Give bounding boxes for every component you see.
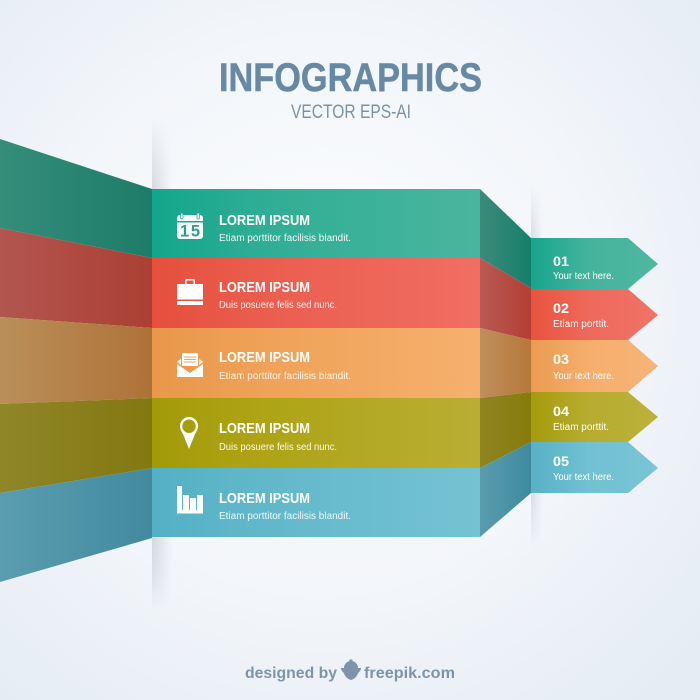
title: INFOGRAPHICS (219, 56, 482, 100)
panel: band 2 red (152, 258, 480, 329)
heading: LOREM IPSUM (219, 213, 310, 229)
footer credit: designed by (245, 665, 337, 682)
number: 01 (553, 253, 569, 269)
text block: Duis posuere felis sed nunc. (219, 442, 337, 453)
icon: calendar: 15 (180, 222, 200, 240)
right fold bands (480, 189, 531, 537)
footer credit: freepik.com (364, 665, 455, 682)
text block: Etiam porttitor facilisis blandit. (219, 371, 351, 382)
caption: Etiam porttit. (553, 319, 609, 330)
caption: Your text here. (553, 371, 614, 382)
arrow 03 orange (531, 340, 658, 392)
subtitle: VECTOR EPS-AI (291, 102, 411, 123)
panel: band 3 orange (152, 328, 480, 399)
arrow 01 teal (531, 238, 658, 289)
heading: LOREM IPSUM (219, 350, 310, 366)
icon: envelope (177, 353, 203, 377)
text block: Etiam porttitor facilisis blandit. (219, 233, 351, 244)
heading: LOREM IPSUM (219, 491, 310, 507)
arrow 05 blue (531, 442, 658, 493)
panel: band 4 olive (152, 398, 480, 469)
footer credit (245, 660, 455, 682)
icon: map pin (180, 417, 198, 449)
left receding bands (0, 139, 152, 582)
icon: bar chart (177, 486, 203, 514)
panel: band 1 teal (152, 189, 480, 259)
icon: calendar (177, 213, 203, 240)
heading: LOREM IPSUM (219, 421, 310, 437)
caption: Your text here. (553, 472, 614, 483)
heading: LOREM IPSUM (219, 280, 310, 296)
arrow 04 olive (531, 392, 658, 442)
arrow 02 red (531, 289, 658, 340)
icon: briefcase (177, 279, 203, 305)
number: 04 (553, 403, 569, 419)
caption: Your text here. (553, 271, 614, 282)
icon: freepik logo (341, 660, 361, 680)
text block: Etiam porttitor facilisis blandit. (219, 511, 351, 522)
caption: Etiam porttit. (553, 422, 609, 433)
text block: Duis posuere felis sed nunc. (219, 300, 337, 311)
number: 03 (553, 351, 569, 367)
panel: band 5 blue (152, 468, 480, 537)
number: 05 (553, 453, 569, 469)
fold shadows (152, 118, 543, 610)
number: 02 (553, 300, 569, 316)
